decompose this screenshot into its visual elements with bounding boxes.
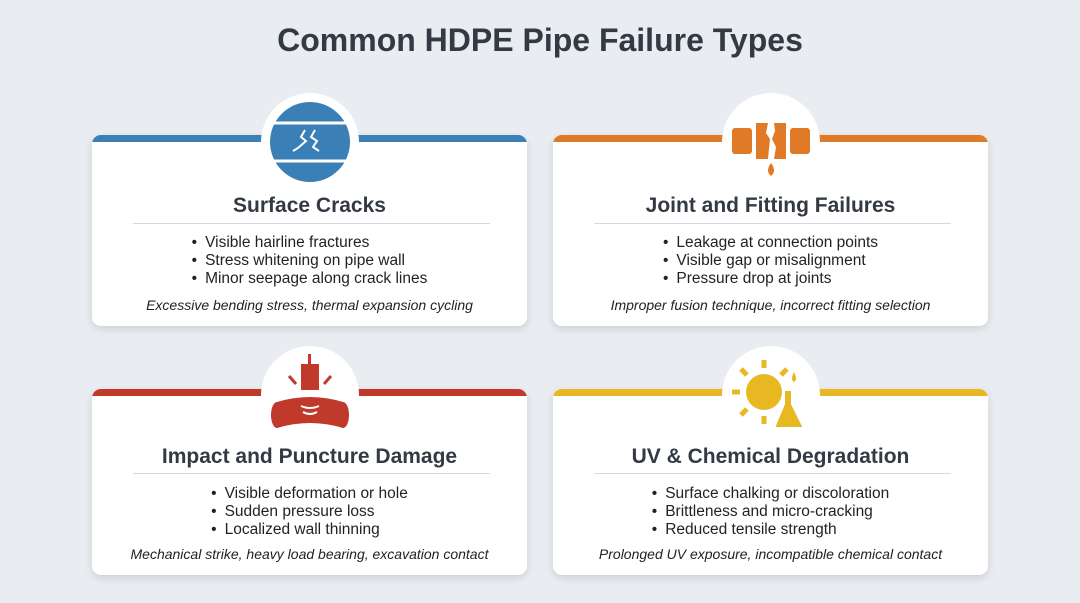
bullets: Brittleness and micro-cracking: [665, 503, 873, 520]
icon: impact: [261, 346, 359, 444]
heading: Surface Cracks: [233, 194, 386, 217]
bullets: Surface chalking or discoloration: [665, 485, 889, 502]
cause note: Mechanical strike, heavy load bearing, excavation contact: [130, 546, 488, 562]
bullets: [664, 234, 878, 287]
cause note: Excessive bending stress, thermal expansion cycling: [146, 297, 473, 313]
heading: UV & Chemical Degradation: [632, 445, 909, 468]
bullets: [212, 485, 408, 538]
cause note: Prolonged UV exposure, incompatible chemical contact: [599, 546, 942, 562]
bullets: Reduced tensile strength: [665, 521, 837, 538]
heading: Impact and Puncture Damage: [162, 445, 457, 468]
bullets: Sudden pressure loss: [225, 503, 375, 520]
cause note: Improper fusion technique, incorrect fitting selection: [611, 297, 930, 313]
bullets: Stress whitening on pipe wall: [205, 252, 405, 269]
bullets: Minor seepage along crack lines: [205, 270, 427, 287]
panel: joint failures: [551, 93, 990, 331]
icon: cracked pipe: [261, 93, 359, 191]
heading: Joint and Fitting Failures: [646, 194, 895, 217]
icon: leaking joint: [722, 93, 820, 191]
bullets: Visible deformation or hole: [225, 485, 408, 502]
bullets: Visible gap or misalignment: [676, 252, 866, 269]
bullets: Pressure drop at joints: [676, 270, 831, 287]
panel: impact damage: [90, 346, 529, 580]
icon: sun and flask: [722, 346, 820, 444]
bullets: Leakage at connection points: [676, 234, 878, 251]
panel: surface cracks: [90, 93, 529, 331]
bullets: [652, 485, 889, 538]
title: Common HDPE Pipe Failure Types: [277, 22, 803, 58]
bullets: [192, 234, 427, 287]
panel: UV & chemical: [551, 346, 990, 580]
bullets: Localized wall thinning: [225, 521, 380, 538]
bullets: Visible hairline fractures: [205, 234, 369, 251]
